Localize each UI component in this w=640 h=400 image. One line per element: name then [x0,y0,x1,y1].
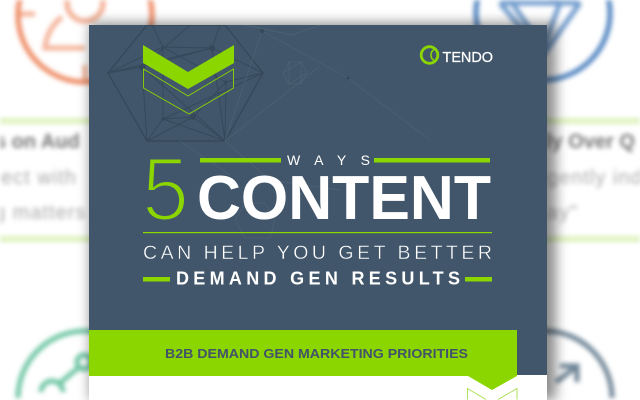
blurred right text: gently ind [547,167,640,189]
icon: green network circle [18,331,152,398]
faint network lines [180,25,430,238]
icon: grey arrow circle [478,331,612,398]
ways right bar [374,158,490,162]
banner text: B2B DEMAND GEN MARKETING PRIORITIES [165,346,468,361]
ways left bar [200,158,281,162]
card dark panel [89,25,547,375]
geometric network decoration [108,25,430,238]
blurred right text: ly Over Q [546,131,635,153]
logo: TENDO [421,47,493,66]
numeral 5: 5 [142,140,189,240]
chevron icon [143,45,234,114]
divider lines [0,118,640,242]
logo: TENDO: TENDO [442,50,493,66]
blurred right text [546,131,640,224]
subtitle line: CAN HELP YOU GET BETTER [143,242,492,264]
card white lower panel [89,375,547,400]
infographic card [82,14,564,400]
icon: orange audience circle [17,0,152,82]
demand left bar [143,277,170,282]
demand right bar [465,277,492,282]
blurred right text: ay" [547,202,578,224]
blurred left text [0,131,86,224]
lower chevron outline [468,388,517,400]
content headline: CONTENT [197,164,491,233]
green banner [89,330,517,390]
demand gen results: DEMAND GEN RESULTS [176,268,460,288]
large hexagon network [108,25,263,141]
icon: blue diamond circle [476,0,610,80]
thin divider [143,232,492,233]
card shadow [90,23,556,400]
ways label: WAYS [287,152,370,168]
title block [142,140,492,288]
